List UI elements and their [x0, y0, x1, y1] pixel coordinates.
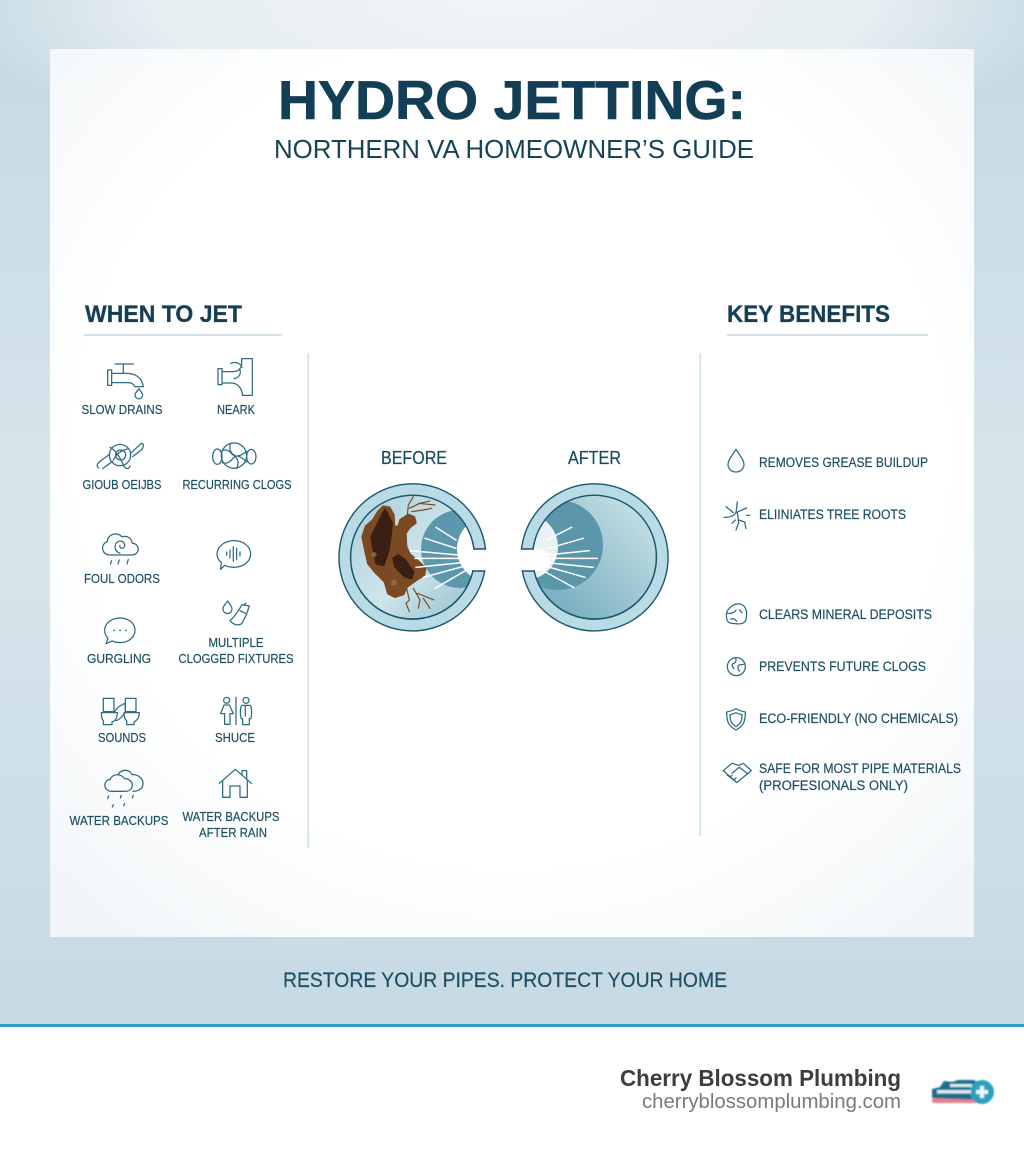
pipe: after — [520, 483, 669, 632]
water jet rays — [410, 527, 467, 588]
item: multiple clogged fixtures: CLOGGED FIXTURES — [178, 651, 294, 666]
heading: when to jet: WHEN TO JET — [85, 301, 242, 328]
item: water backups after rain — [182, 769, 280, 840]
item: water backups: WATER BACKUPS — [70, 813, 169, 828]
item: shuce — [215, 697, 255, 745]
item: clogs knot — [82, 443, 162, 492]
item: gurgling: GURGLING — [87, 651, 151, 666]
item: gurgling — [87, 618, 151, 666]
benefit: prevents future clogs — [727, 658, 926, 676]
item: water backups after rain: WATER BACKUPS — [182, 809, 280, 824]
main white panel — [50, 49, 974, 937]
benefit: removes grease buildup: REMOVES GREASE BUILDUP — [759, 455, 928, 470]
item: multiple clogged fixtures: MULTIPLE — [208, 635, 264, 650]
item: foul odors — [84, 534, 160, 586]
benefit: eliminates tree roots — [724, 502, 906, 530]
item: foul odors: FOUL ODORS — [84, 571, 160, 586]
footer: website: cherryblossomplumbing.com — [642, 1091, 901, 1113]
footer: company name: Cherry Blossom Plumbing — [620, 1065, 901, 1091]
benefit: safe for most pipe materials: (PROFESIONALS ONLY) — [759, 778, 908, 793]
benefit: prevents future clogs: PREVENTS FUTURE CLOGS — [759, 659, 926, 674]
item: water backups — [70, 770, 169, 828]
item: water backups after rain: AFTER RAIN — [199, 825, 267, 840]
logo — [932, 1080, 994, 1104]
benefit: eco-friendly: ECO-FRIENDLY (NO CHEMICALS) — [759, 711, 958, 726]
subtitle: NORTHERN VA HOMEOWNER’S GUIDE — [274, 134, 754, 164]
item: slow drains — [82, 364, 163, 417]
item: neark: NEARK — [217, 402, 255, 417]
benefit: eliminates tree roots: ELIINIATES TREE ROOTS — [759, 507, 906, 522]
item: slow drains: SLOW DRAINS — [82, 402, 163, 417]
panel: when to jet — [70, 301, 294, 840]
item: sounds: SOUNDS — [98, 730, 146, 745]
benefit: clears mineral deposits: CLEARS MINERAL DEPOSITS — [759, 607, 932, 622]
footer — [0, 1024, 1024, 1154]
benefit: clears mineral deposits — [726, 604, 932, 624]
label: before: BEFORE — [381, 448, 447, 468]
heading: key benefits: KEY BENEFITS — [727, 301, 890, 328]
tagline: RESTORE YOUR PIPES. PROTECT YOUR HOME — [283, 969, 727, 992]
item: recurring clogs — [182, 443, 292, 492]
benefit: eco-friendly — [727, 709, 958, 730]
item: multiple clogged fixtures — [178, 601, 294, 666]
item: neark — [217, 359, 255, 417]
label: after: AFTER — [568, 448, 621, 468]
item: sounds — [98, 698, 146, 745]
title: HYDRO JETTING: — [278, 69, 746, 131]
benefit: safe for most pipe materials: SAFE FOR MOST PIPE MATERIALS — [759, 761, 961, 776]
panel: key benefits — [723, 301, 961, 793]
benefit: safe for most pipe materials — [723, 761, 961, 793]
item: clogs knot: GIOUB OEIJBS — [82, 477, 162, 492]
right divider — [700, 353, 701, 836]
benefit: removes grease buildup — [728, 449, 928, 472]
brown clog — [363, 497, 467, 612]
icon: sound bubble — [217, 541, 251, 569]
item: shuce: SHUCE — [215, 730, 255, 745]
panel: before and after diagram — [339, 448, 668, 631]
item: recurring clogs: RECURRING CLOGS — [182, 477, 292, 492]
pipe: before — [338, 483, 486, 632]
left divider — [308, 353, 309, 848]
